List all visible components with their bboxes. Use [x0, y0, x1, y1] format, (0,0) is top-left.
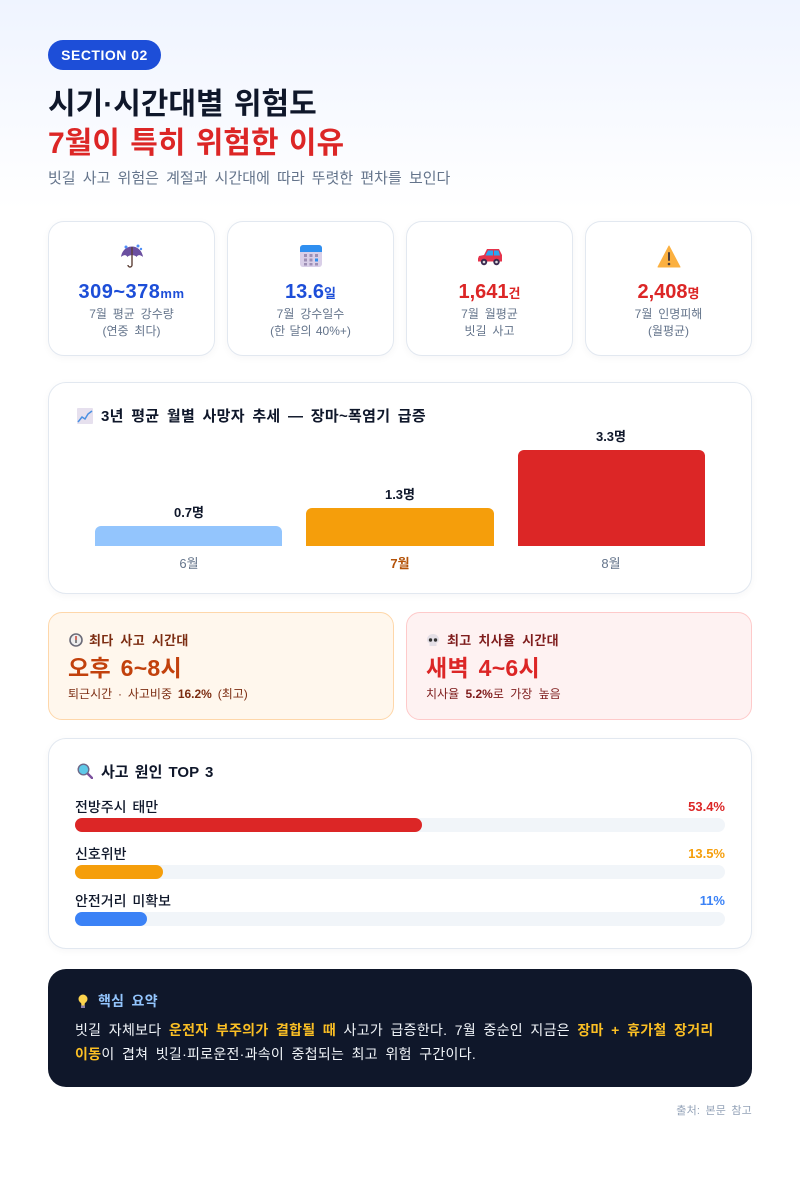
stat card: casualties [585, 221, 752, 356]
subtitle: 빗길 사고 위험은 계절과 시간대에 따라 뚜렷한 편차를 보인다 [48, 170, 450, 187]
icon: warning [658, 246, 680, 268]
label: 7월 강수일수 [277, 307, 344, 321]
label [635, 307, 702, 338]
source note: 출처: 본문 참고 [676, 1105, 752, 1117]
cause row: signal violation [75, 846, 725, 879]
stat card: rainy days [227, 221, 394, 356]
chart heading: 3년 평균 월별 사망자 추세 — 장마~폭염기 급증 [101, 408, 426, 425]
icon: magnifier [78, 764, 93, 779]
panel: highest fatality time [406, 612, 752, 720]
background gradient [0, 0, 800, 210]
bar: August [518, 450, 705, 546]
bar: July [306, 508, 494, 546]
stat card: accidents [406, 221, 573, 356]
label: 빗길 사고 [464, 324, 514, 338]
cause row: inattention [75, 799, 725, 832]
summary text [75, 1022, 714, 1062]
panel: monthly deaths chart [48, 382, 752, 594]
progress bar [75, 818, 725, 832]
progress bar [75, 912, 725, 926]
label: 전방주시 태만 [75, 799, 158, 815]
heading: 핵심 요약 [98, 993, 158, 1009]
label: 7월 인명피해 [635, 307, 702, 321]
icon: skull [427, 634, 439, 646]
label: 신호위반 [75, 846, 127, 862]
label: 최다 사고 시간대 [89, 633, 189, 648]
icon: clock [69, 633, 83, 647]
icon: umbrella [121, 244, 143, 268]
percentage: 13.5% [688, 846, 725, 861]
note: 퇴근시간 · 사고비중 16.2% (최고) [68, 687, 248, 701]
percentage: 53.4% [688, 799, 725, 814]
section badge [48, 40, 161, 70]
summary text: 이동이 겹쳐 빗길·피로운전·과속이 중첩되는 최고 위험 구간이다. [75, 1046, 476, 1062]
value: 309~378mm [78, 281, 185, 303]
label [89, 307, 174, 338]
value: August: 3.3명 [596, 429, 626, 444]
percentage: 11% [700, 893, 725, 908]
value: July: 1.3명 [385, 487, 415, 502]
heading: 사고 원인 TOP 3 [101, 764, 213, 781]
note: 치사율 5.2%로 가장 높음 [426, 687, 561, 701]
cause row: safe distance [75, 893, 725, 926]
label: 7월 평균 강수량 [89, 307, 174, 321]
label [270, 307, 351, 338]
label: 최고 치사율 시간대 [447, 633, 559, 648]
title: 7월이 특히 위험한 이유 [48, 127, 344, 160]
icon: car [478, 249, 502, 266]
label: 7월 월평균 [461, 307, 518, 321]
value: June: 0.7명 [174, 505, 204, 520]
panel: key summary [48, 969, 752, 1087]
label: (월평균) [648, 324, 689, 338]
label: 안전거리 미확보 [75, 893, 171, 909]
label: (연중 최다) [102, 324, 160, 338]
stat card: rainfall [48, 221, 215, 356]
title [48, 88, 344, 160]
icon: chart [77, 408, 93, 424]
label [461, 307, 518, 338]
panel: peak accident time [48, 612, 394, 720]
label: (한 달의 40%+) [270, 324, 351, 338]
bar: June [95, 526, 282, 546]
month: July: 7월 [390, 556, 410, 571]
value: 1,641건 [458, 281, 521, 303]
section badge: SECTION 02 [61, 47, 148, 63]
title: 시기·시간대별 위험도 [48, 88, 317, 121]
month: August: 8월 [601, 556, 621, 571]
value: 2,408명 [637, 281, 700, 303]
progress bar [75, 865, 725, 879]
bar chart [95, 429, 705, 571]
value: 새벽 4~6시 [426, 655, 540, 681]
summary text: 빗길 자체보다 운전자 부주의가 결합될 때 사고가 급증한다. 7월 중순인 지금은 장마 + 휴가철 장거리 [75, 1022, 714, 1038]
icon: calendar [300, 245, 322, 267]
month: June: 6월 [179, 556, 199, 571]
value: 오후 6~8시 [68, 655, 182, 681]
value: 13.6일 [285, 281, 336, 303]
panel: top 3 causes [48, 738, 752, 949]
icon: light bulb [78, 994, 88, 1008]
